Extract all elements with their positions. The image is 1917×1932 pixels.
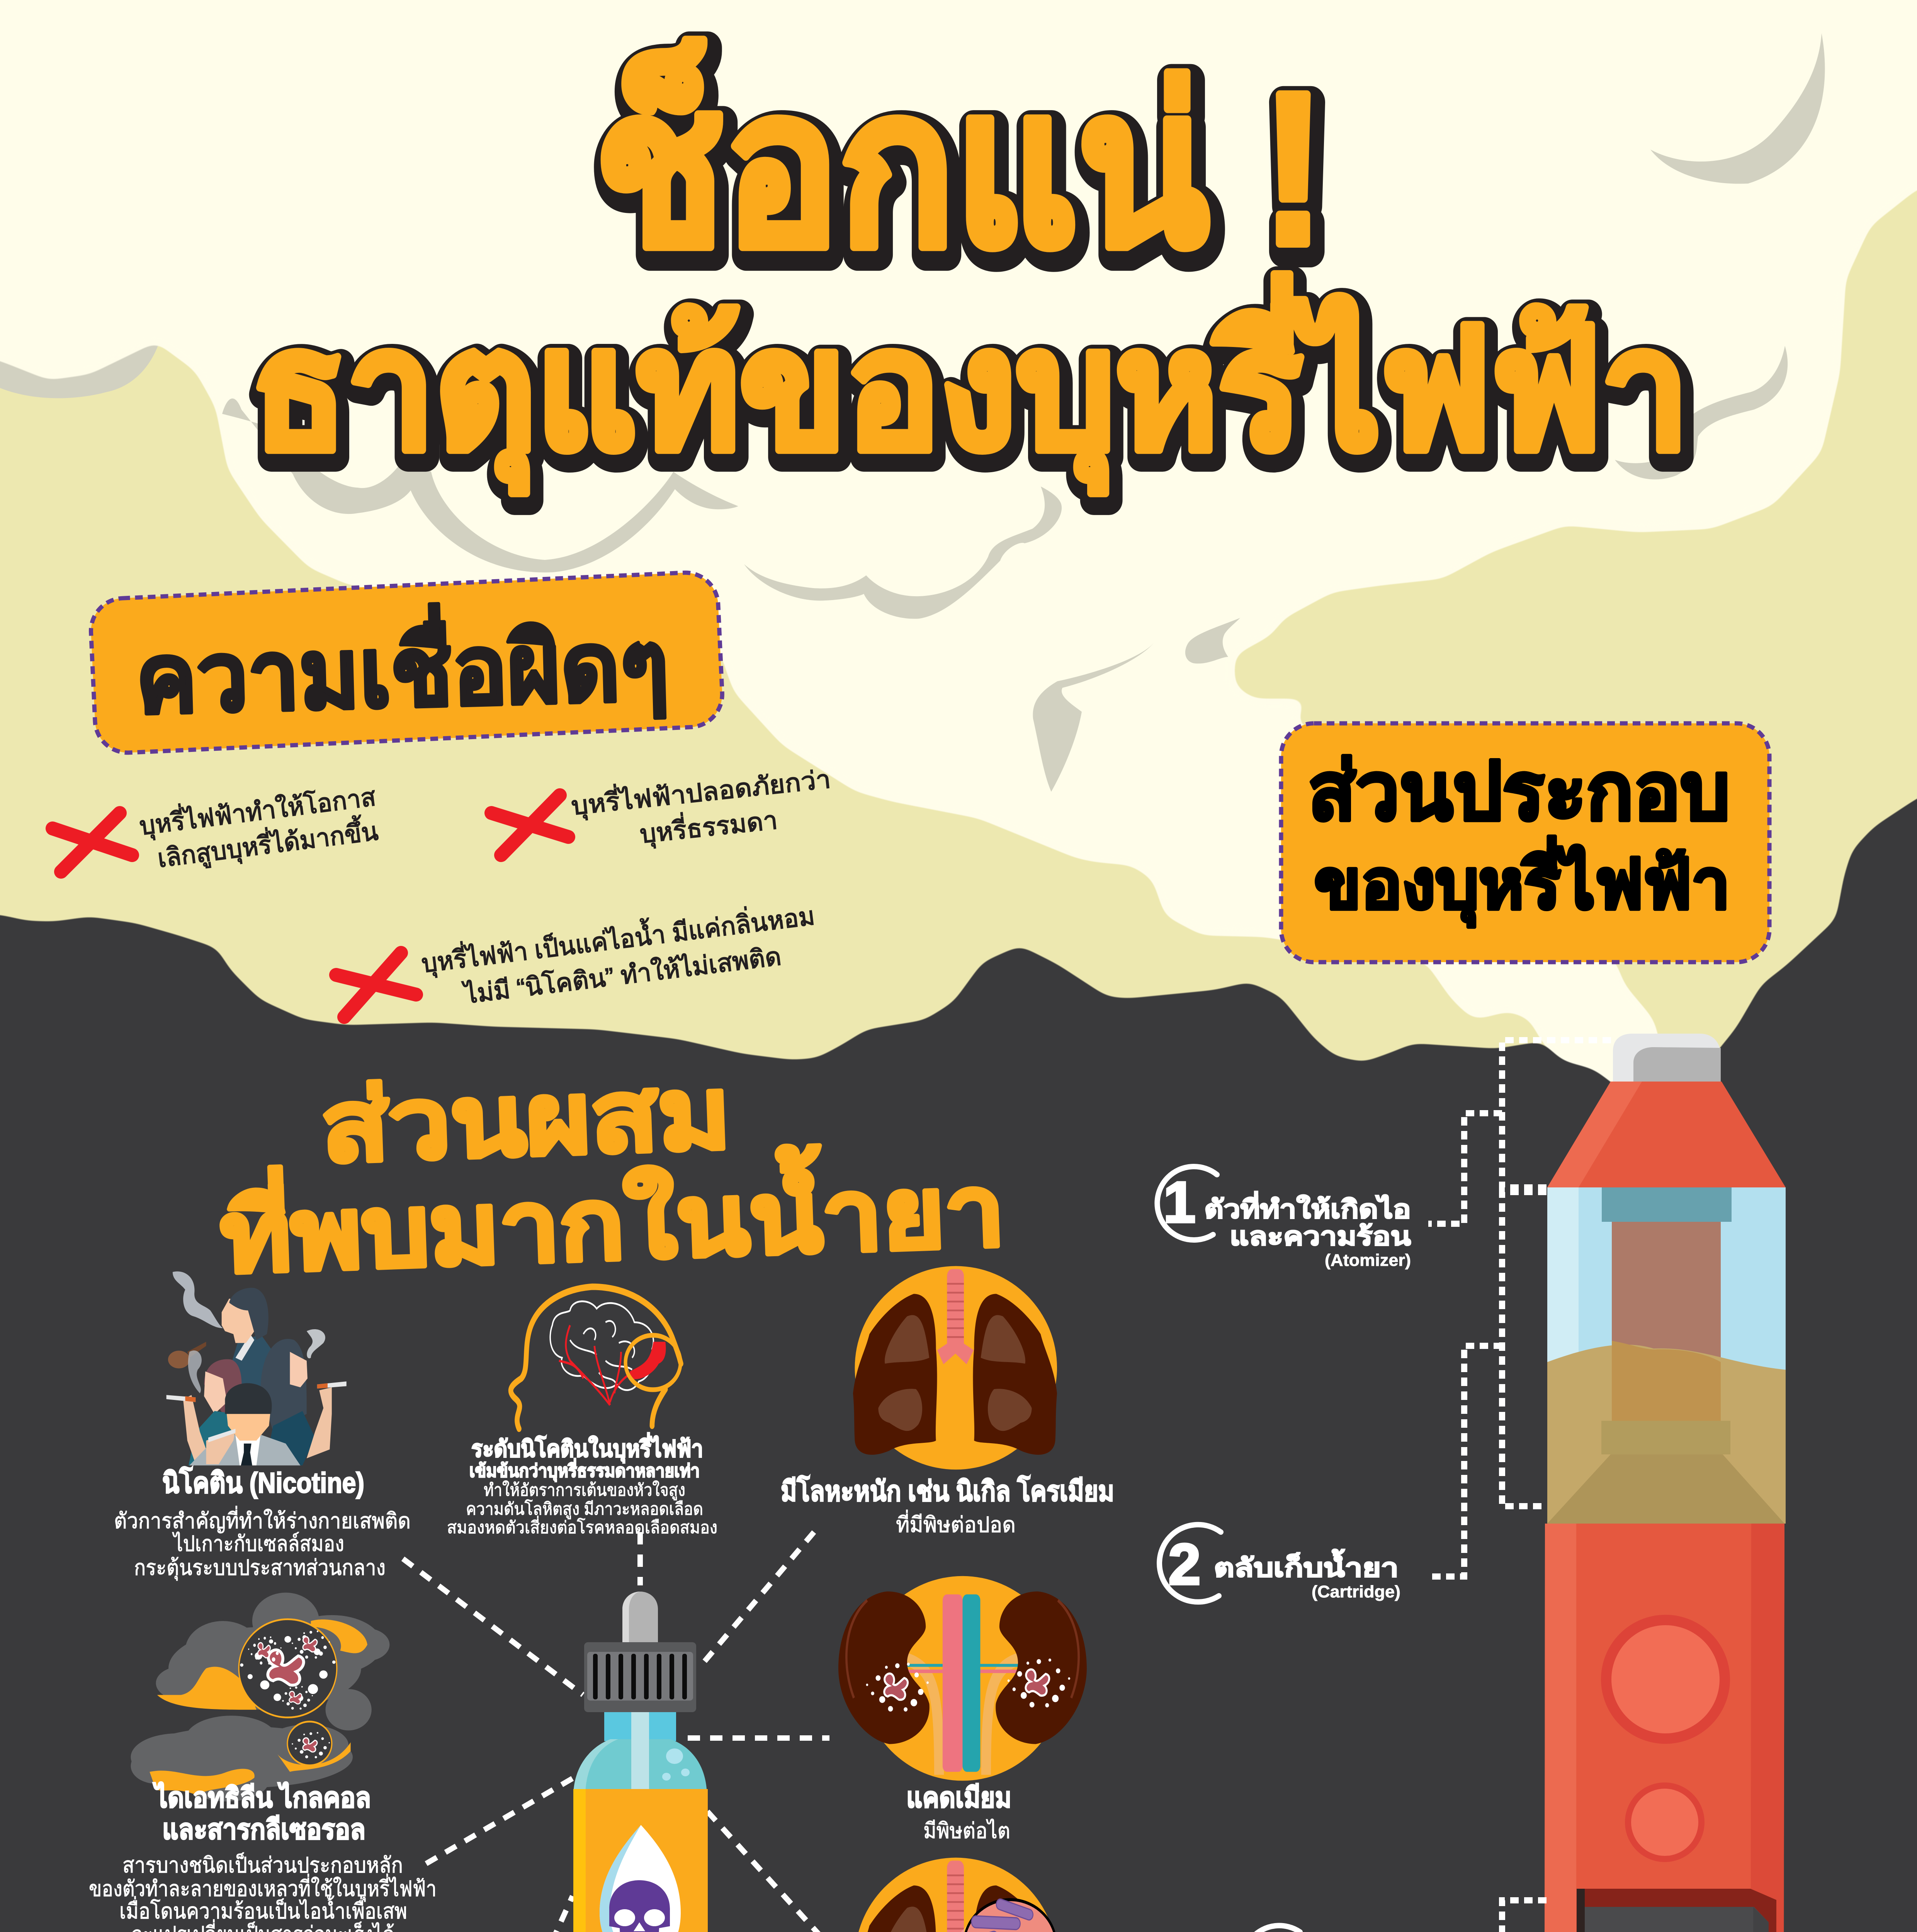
title line 1: ช็อกแน่ ! bbox=[595, 37, 1325, 289]
label 1: atomizer bbox=[1157, 1167, 1411, 1270]
myth 2 text: บุหรี่ไฟฟ้าปลอดภัยกว่า bbox=[569, 762, 832, 822]
icon: red cross bbox=[491, 795, 568, 855]
icon: lungs with benzene bbox=[853, 1858, 1057, 1932]
background: smoke shadow crescents bbox=[222, 33, 1825, 792]
vape body bbox=[1544, 1524, 1784, 1932]
nicotine level body: สมองหดตัวเสี่ยงต่อโรคหลอดเลือดสมอง bbox=[447, 1515, 717, 1537]
myth 3 text: ไม่มี “นิโคติน” ทำให้ไม่เสพติด bbox=[461, 942, 783, 1009]
heading text: ส่วนประกอบ bbox=[1308, 747, 1730, 837]
vape glass tank bbox=[1547, 1187, 1786, 1524]
vape top section bbox=[1547, 1082, 1786, 1187]
text block: cadmium bbox=[906, 1782, 1011, 1843]
text block: nicotine level bbox=[447, 1432, 717, 1537]
heading: ingredients: ส่วนผสม bbox=[320, 1058, 732, 1182]
cartridge text bbox=[1214, 1549, 1400, 1601]
nicotine title: นิโคติน (Nicotine) bbox=[162, 1466, 364, 1499]
number badge 1: 1 bbox=[1163, 1170, 1196, 1235]
label 2: cartridge bbox=[1159, 1525, 1400, 1602]
cartridge text: (Cartridge) bbox=[1312, 1582, 1400, 1601]
diethylene glycol body: เมื่อโดนความร้อนเป็นไอน้ำเพื่อเสพ bbox=[119, 1896, 407, 1923]
myth 1 text bbox=[137, 779, 382, 876]
cadmium title: แคดเมียม bbox=[906, 1782, 1011, 1813]
vape liquid bbox=[1547, 1345, 1786, 1524]
icon: people smoking bbox=[167, 1271, 347, 1465]
heading box bbox=[1281, 723, 1769, 962]
text block: nicotine bbox=[114, 1466, 411, 1581]
title line 2: ธาตุแท้ของบุหรี่ไฟฟ้า bbox=[255, 281, 1692, 501]
cartridge text: ตลับเก็บน้ำยา bbox=[1214, 1549, 1399, 1582]
myth 1 text: เลิกสูบบุหรี่ได้มากขึ้น bbox=[155, 813, 380, 874]
vape large button bbox=[1601, 1615, 1730, 1744]
heavy metals body: ที่มีพิษต่อปอด bbox=[896, 1510, 1016, 1537]
nicotine body: ไปเกาะกับเซลล์สมอง bbox=[172, 1531, 344, 1556]
nicotine body: กระตุ้นระบบประสาทส่วนกลาง bbox=[134, 1555, 386, 1581]
nicotine body bbox=[114, 1506, 411, 1581]
nicotine level body: ทำให้อัตราการเต้นของหัวใจสูง bbox=[484, 1480, 685, 1500]
myth 3 text: บุหรี่ไฟฟ้า เป็นแค่ไอน้ำ มีแค่กลิ่นหอม bbox=[419, 898, 817, 980]
bottle label bbox=[573, 1789, 708, 1932]
background: cream smoke bbox=[0, 0, 1917, 1101]
heading box bbox=[90, 571, 724, 754]
diethylene glycol title: ไดเอทธิลีน ไกลคอล bbox=[153, 1781, 371, 1813]
nicotine level body bbox=[447, 1480, 717, 1537]
myth 3 bbox=[336, 898, 821, 1017]
nicotine level subtitle: เข้มข้นกว่าบุหรี่ธรรมดาหลายเท่า bbox=[469, 1458, 700, 1482]
vape top cap bbox=[1602, 1187, 1732, 1222]
atomizer text: และความร้อน bbox=[1230, 1222, 1411, 1250]
icon: red cross bbox=[53, 813, 132, 872]
heavy metals title: มีโลหะหนัก เช่น นิเกิล โครเมียม bbox=[781, 1475, 1114, 1507]
panel: misconceptions heading bbox=[90, 571, 724, 754]
dashed connectors to e-cigarette bbox=[1422, 1040, 1611, 1932]
panel: components heading bbox=[1281, 723, 1769, 962]
heading: ingredients bbox=[215, 1048, 1006, 1293]
bottle neck bbox=[604, 1712, 676, 1741]
icon: red cross bbox=[336, 953, 416, 1017]
label 3: battery bbox=[1242, 1925, 1412, 1932]
background: smoke shadow left bbox=[0, 332, 162, 398]
panel: components heading: ของบุหรี่ไฟฟ้า bbox=[1314, 836, 1730, 927]
cadmium body: มีพิษต่อไต bbox=[923, 1818, 1010, 1843]
myth 3 text bbox=[419, 898, 821, 1014]
atomizer text: (Atomizer) bbox=[1325, 1251, 1411, 1270]
title line 2: ธาตุแท้ของบุหรี่ไฟฟ้า bbox=[252, 274, 1689, 494]
number badge 1 bbox=[1157, 1167, 1217, 1240]
dashed connectors to bottle bbox=[403, 1532, 845, 1932]
title bbox=[252, 37, 1692, 501]
myth 1 bbox=[53, 779, 382, 876]
number badge 3 bbox=[1242, 1925, 1300, 1932]
bottle body bbox=[573, 1739, 708, 1932]
icon: head with brain bbox=[511, 1287, 681, 1429]
bottle cap bbox=[584, 1642, 696, 1712]
icon: skull bbox=[609, 1880, 670, 1932]
title line 1: ช็อกแน่ ! bbox=[599, 45, 1329, 297]
number badge 2: 2 bbox=[1168, 1532, 1201, 1597]
diethylene glycol title bbox=[153, 1781, 371, 1845]
myth 2 text bbox=[569, 762, 836, 857]
number badge 2 bbox=[1159, 1525, 1221, 1602]
nicotine level title: ระดับนิโคตินในบุหรี่ไฟฟ้า bbox=[471, 1432, 703, 1463]
nicotine body: ตัวการสำคัญที่ทำให้ร่างกายเสพติด bbox=[114, 1506, 411, 1533]
vape small button bbox=[1625, 1782, 1705, 1862]
diethylene glycol body bbox=[89, 1852, 437, 1932]
icon: smoke clouds with carcinogens bbox=[131, 1593, 389, 1801]
background: dark ground bbox=[0, 753, 1917, 1932]
diethylene glycol body: สารบางชนิดเป็นส่วนประกอบหลัก bbox=[122, 1852, 403, 1877]
nicotine level body: ความดันโลหิตสูง มีภาวะหลอดเลือด bbox=[466, 1499, 703, 1519]
icon: drop bbox=[600, 1825, 681, 1932]
text block: heavy metals bbox=[781, 1475, 1114, 1537]
vape battery window bbox=[1577, 1889, 1776, 1932]
bottle bubbles bbox=[600, 1748, 690, 1932]
icon: e-cigarette bbox=[1544, 1034, 1786, 1932]
diethylene glycol title: และสารกลีเซอรอล bbox=[162, 1814, 365, 1845]
vape coil tube bbox=[1612, 1221, 1721, 1423]
icon: e-liquid bottle bbox=[573, 1592, 708, 1932]
atomizer text bbox=[1204, 1191, 1411, 1270]
myth 1 text: บุหรี่ไฟฟ้าทำให้โอกาส bbox=[137, 779, 377, 842]
bottle dropper bbox=[622, 1592, 658, 1645]
myth 2 text: บุหรี่ธรรมดา bbox=[638, 803, 779, 850]
heading text: ความเชื่อผิดๆ bbox=[134, 598, 670, 733]
icon: kidneys with cadmium bbox=[838, 1576, 1087, 1781]
vape mouthpiece bbox=[1613, 1034, 1721, 1082]
atomizer text: ตัวที่ทำให้เกิดไอ bbox=[1204, 1191, 1411, 1223]
diethylene glycol body: ของตัวทำละลายของเหลวที่ใช้ในบุหรี่ไฟฟ้า bbox=[89, 1874, 437, 1902]
text block: diethylene glycol bbox=[89, 1781, 437, 1932]
icon: lungs with heavy metals bbox=[853, 1266, 1057, 1469]
heading: ingredients: ที่พบมากในน้ำยา bbox=[218, 1138, 1006, 1293]
bottle highlight strip bbox=[631, 1712, 649, 1789]
myth 2 bbox=[491, 762, 836, 857]
vape ring bbox=[1601, 1421, 1730, 1454]
